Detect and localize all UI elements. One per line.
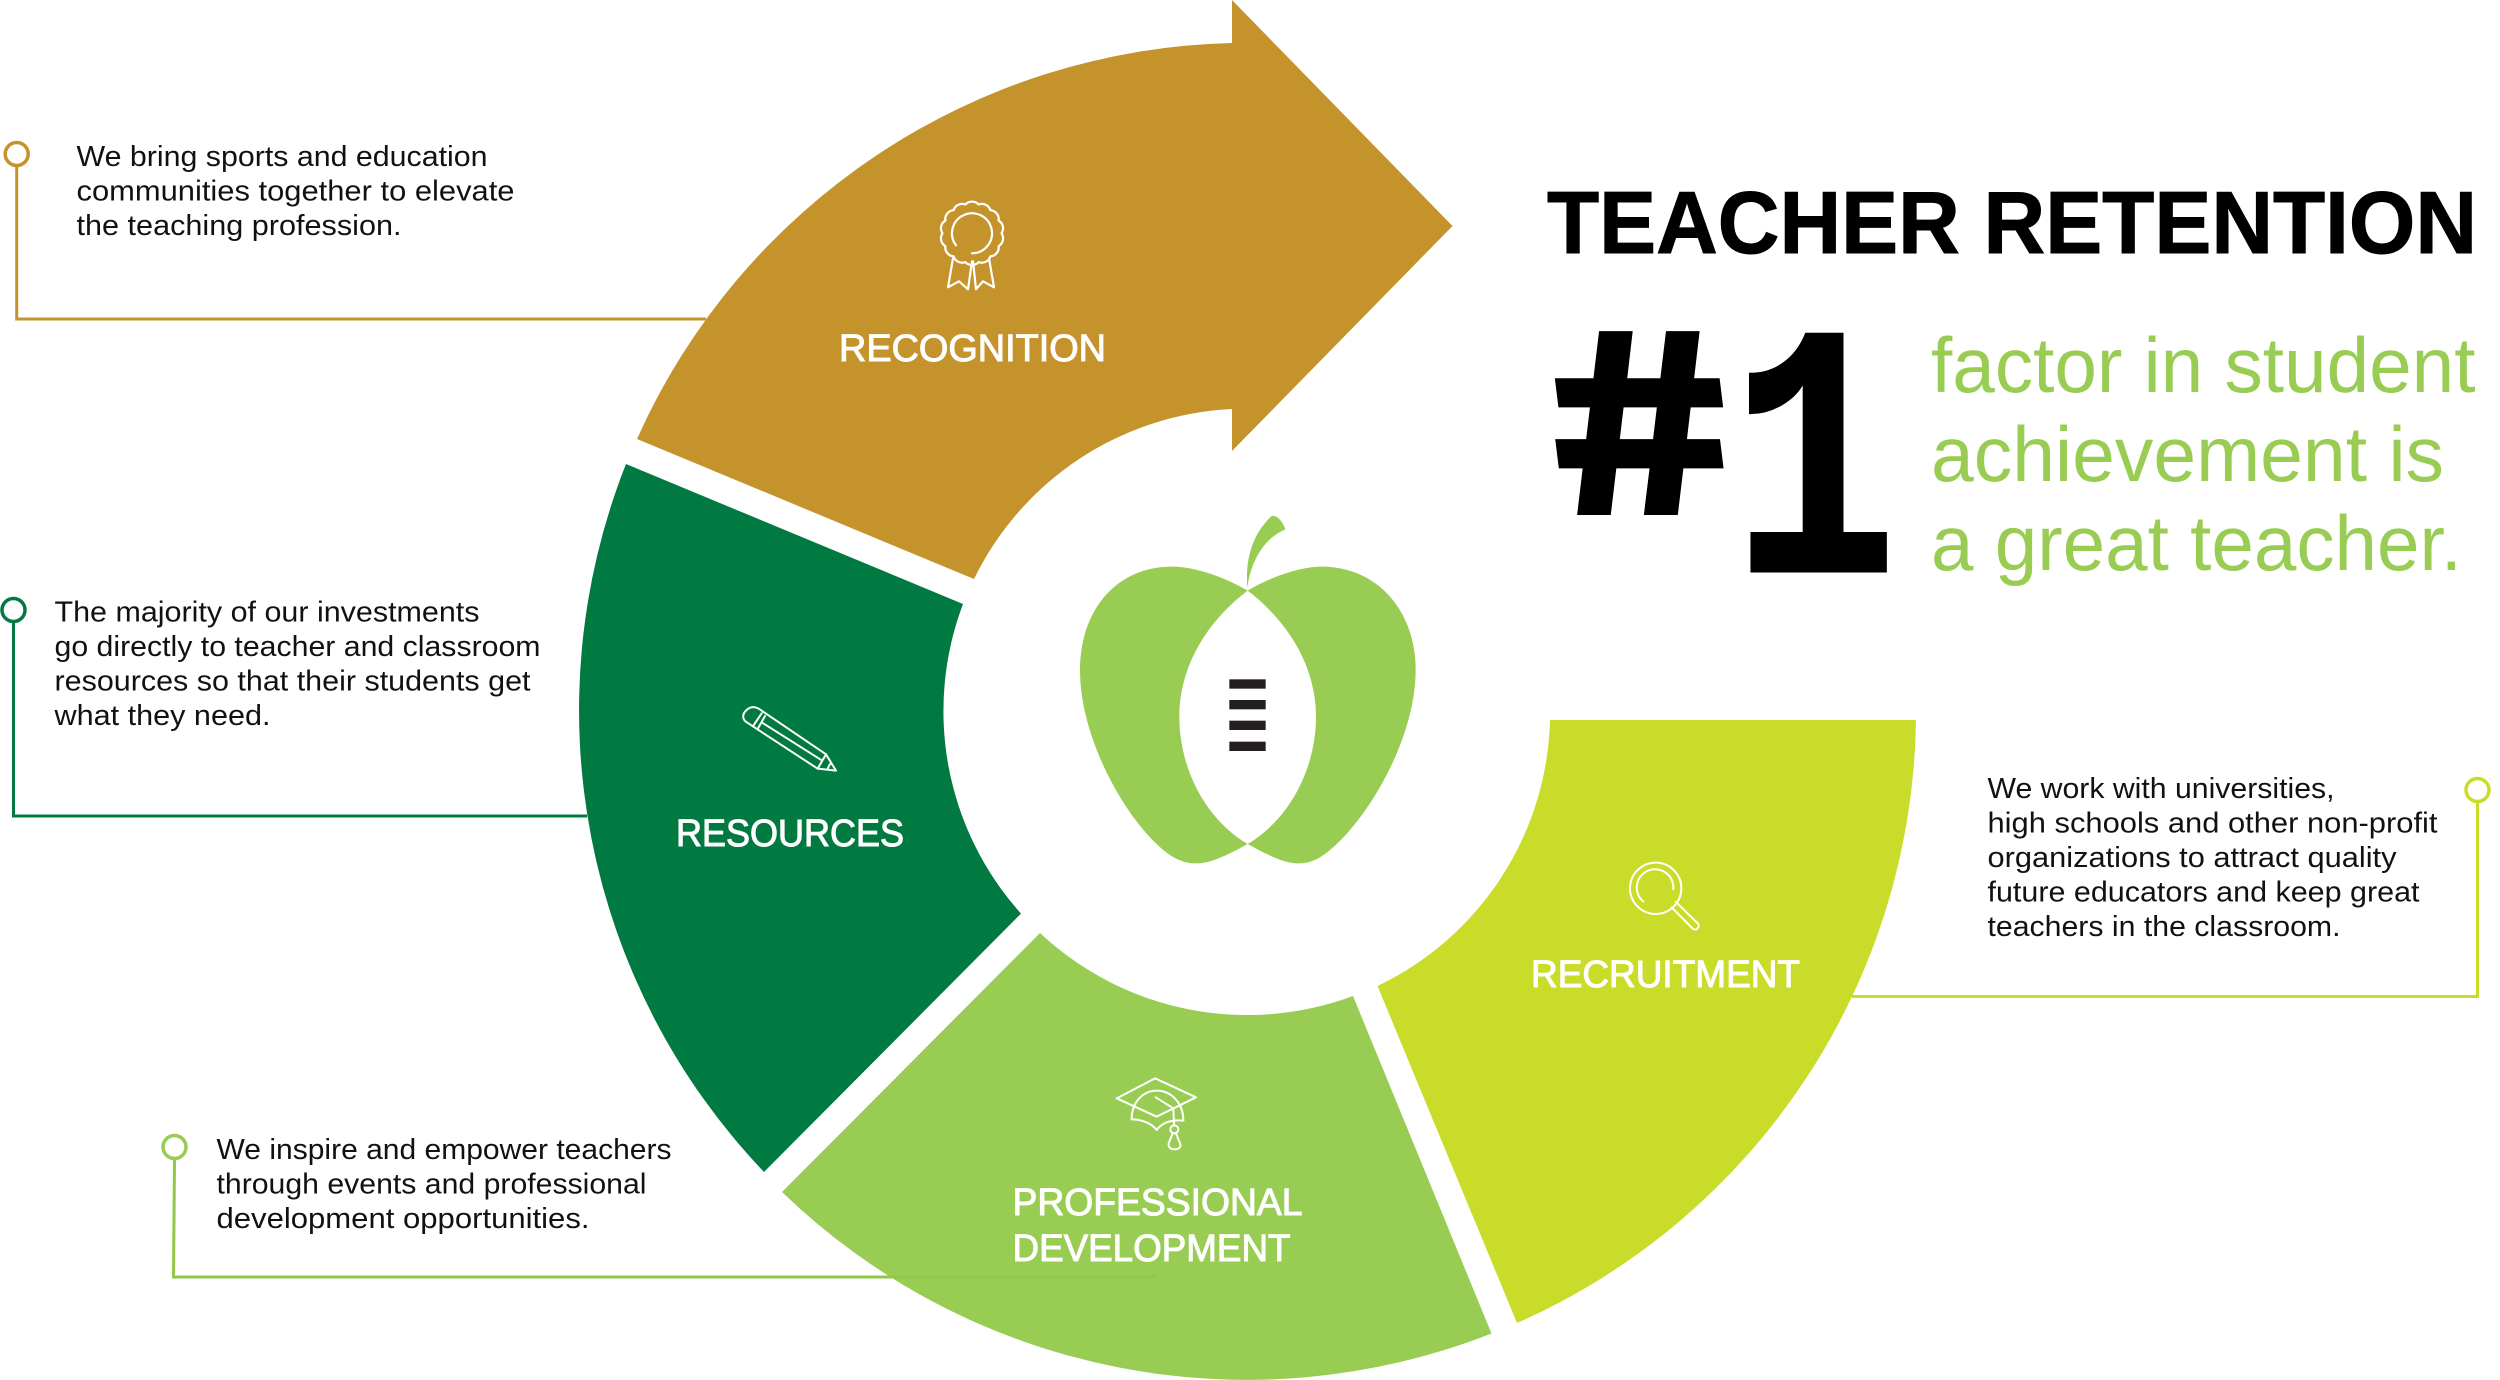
callout text (53, 596, 541, 732)
apple stem (1247, 516, 1285, 588)
label: professional development: DEVELOPMENT (1012, 1228, 1290, 1270)
icon: apple logo (1080, 516, 1416, 863)
label: recognition: RECOGNITION (839, 328, 1106, 370)
icon: pencil (743, 707, 836, 771)
statement text: a great teacher. (1931, 499, 2462, 587)
icon: magnifier (1630, 863, 1699, 930)
callout text: The majority of our investments (54, 596, 480, 628)
apple right half (1248, 567, 1416, 863)
marker (2466, 778, 2489, 802)
marker (2, 598, 25, 622)
callout text: high schools and other non-profit (1988, 808, 2438, 840)
apple left half (1080, 567, 1248, 863)
title: TEACHER RETENTION (1547, 173, 2477, 272)
arrow segment (637, 0, 1452, 579)
callout: professional development (163, 1134, 1156, 1277)
panel: resources (579, 464, 1021, 1172)
segment (1378, 720, 1916, 1323)
label: professional development (1012, 1182, 1302, 1270)
connector line (174, 1160, 1156, 1277)
callout text: We work with universities, (1988, 773, 2334, 805)
callout text: We inspire and empower teachers (216, 1134, 672, 1166)
segment (579, 464, 1021, 1172)
callout text (1988, 773, 2438, 943)
callout text: organizations to attract quality (1988, 842, 2397, 874)
segment (782, 933, 1492, 1380)
panel: recognition (637, 0, 1452, 579)
statement text: achievement is (1931, 410, 2444, 498)
callout text: what they need. (53, 700, 271, 732)
label: resources: RESOURCES (676, 813, 904, 855)
callout: recognition (5, 141, 706, 319)
label: professional development: PROFESSIONAL (1012, 1182, 1302, 1224)
panel: recruitment (1378, 720, 1916, 1323)
callout text: resources so that their students get (54, 666, 530, 698)
callout text: future educators and keep great (1988, 876, 2420, 908)
icon: award ribbon (941, 202, 1003, 289)
callout: recruitment (1852, 773, 2489, 996)
callout text: through events and professional (216, 1168, 646, 1200)
callout text: communities together to elevate (76, 176, 514, 208)
callout: resources (2, 596, 587, 816)
callout text: teachers in the classroom. (1988, 911, 2340, 943)
connector line (17, 167, 706, 319)
statement text: factor in student (1931, 321, 2476, 409)
panel: professional development (782, 933, 1492, 1380)
big number: # (1534, 290, 1749, 590)
icon: graduation cap (1117, 1078, 1196, 1149)
connector line (1852, 803, 2478, 996)
big number (1534, 272, 1897, 678)
marker (5, 142, 28, 166)
statement text (1931, 321, 2476, 587)
marker (163, 1136, 186, 1158)
connector line (14, 623, 587, 816)
label: recruitment: RECRUITMENT (1531, 954, 1800, 996)
callout text: the teaching profession. (76, 210, 402, 242)
callout text: We bring sports and education (76, 141, 487, 173)
callout text (76, 141, 514, 242)
callout text: go directly to teacher and classroom (54, 631, 540, 663)
callout text: development opportunities. (216, 1203, 590, 1235)
football laces (1229, 679, 1266, 751)
big number: 1 (1732, 272, 1897, 678)
callout text (216, 1134, 672, 1235)
